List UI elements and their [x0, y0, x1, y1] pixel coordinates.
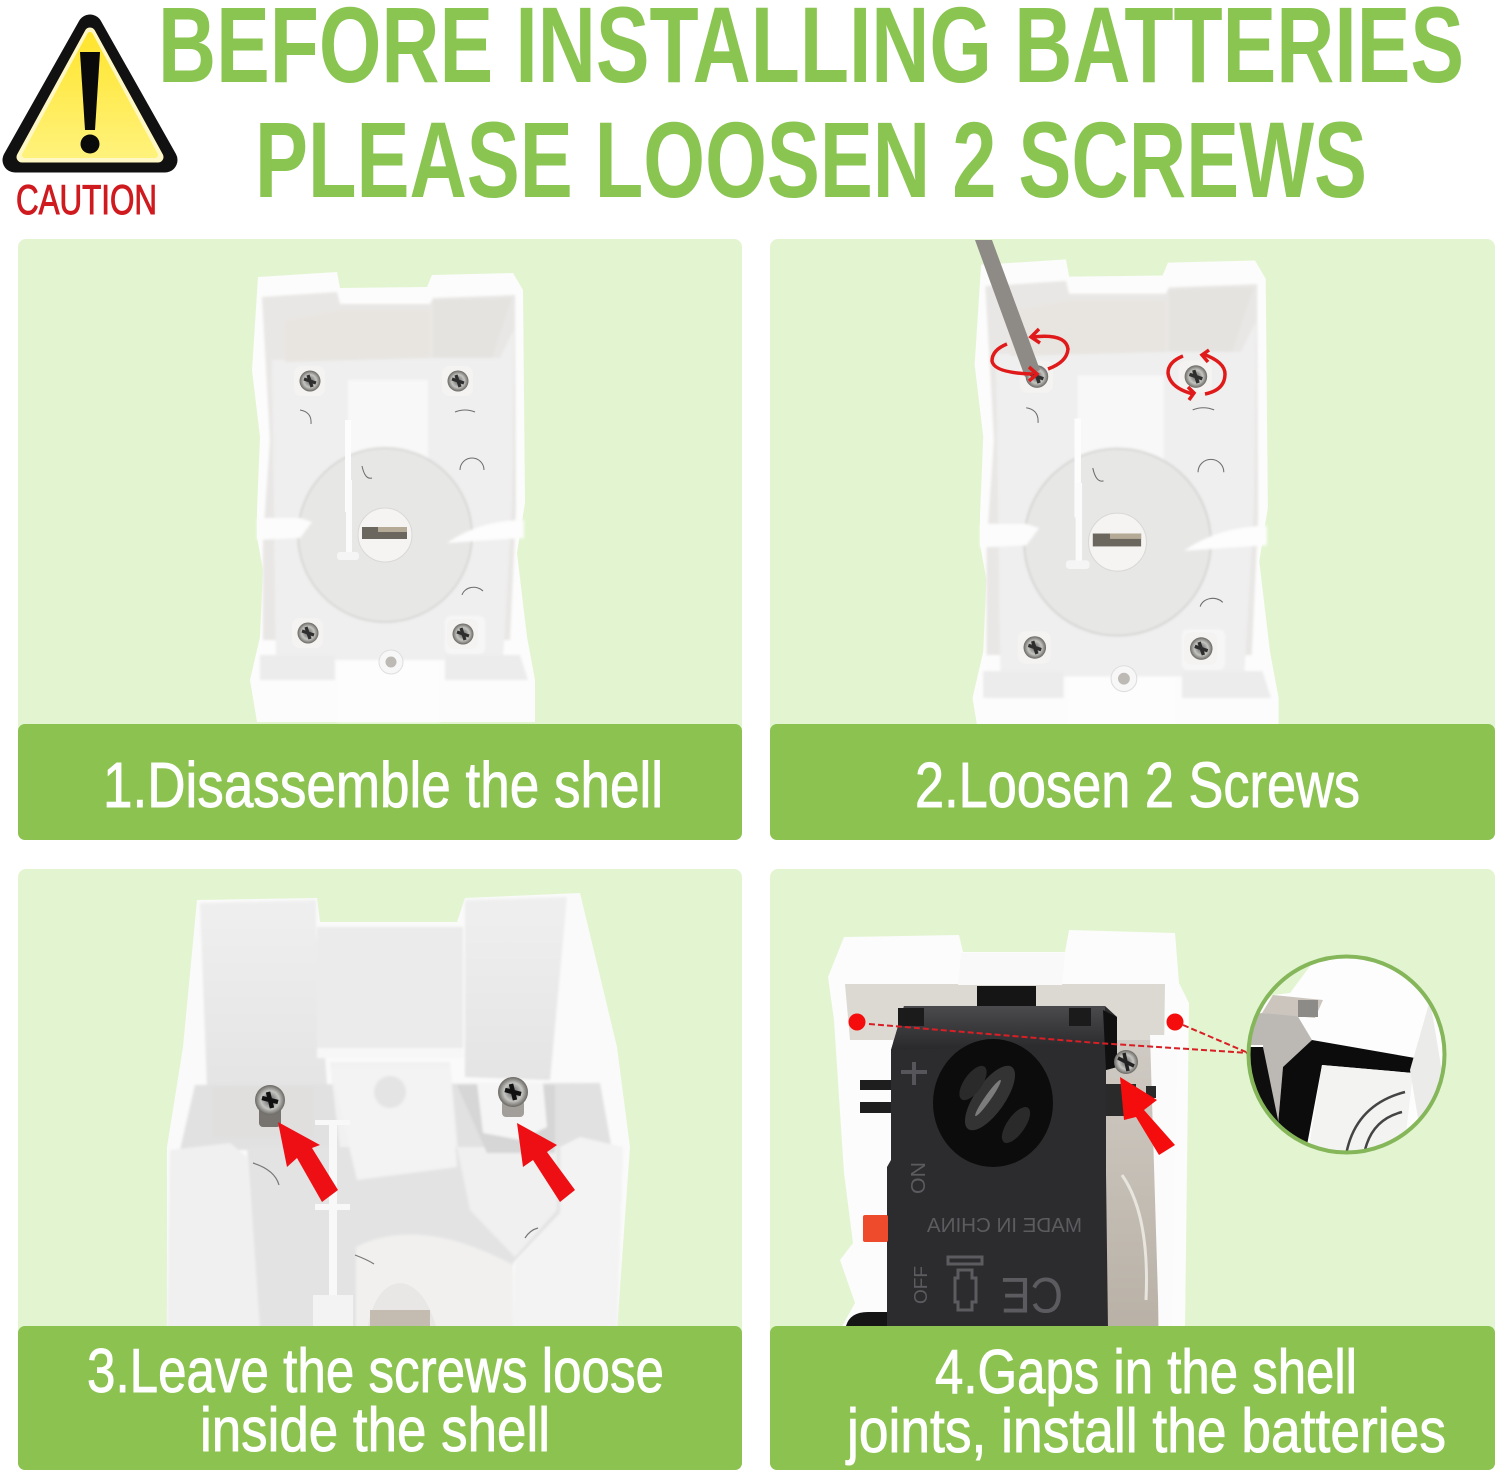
box markings: OFF	[911, 1266, 931, 1304]
panel background	[18, 869, 742, 1470]
shell interior	[845, 984, 1165, 1330]
caption bar	[18, 724, 742, 840]
arrow left	[278, 1122, 338, 1202]
panel background	[18, 239, 742, 840]
photo: close-up of loose screws	[167, 893, 630, 1330]
icon: warning triangle	[15, 27, 165, 160]
box markings: ON	[908, 1162, 930, 1194]
panel: step 2 loosen 2 screws	[770, 239, 1495, 840]
photo: shell with screwdriver	[972, 240, 1279, 743]
caption bar: 4.Gaps in the shell	[935, 1338, 1357, 1407]
box markings: MADE IN CHINA	[926, 1215, 1082, 1237]
caption bar	[770, 1326, 1495, 1470]
caption bar: 3.Leave the screws loose	[87, 1337, 664, 1406]
screw left	[255, 1085, 285, 1127]
caution label: CAUTION	[16, 176, 157, 223]
rotation arrows left	[992, 329, 1068, 381]
plus mark	[901, 1062, 927, 1085]
caption bar	[18, 1326, 742, 1470]
panel background	[770, 239, 1495, 840]
red arrow	[1120, 1077, 1175, 1155]
bottom foot	[846, 1312, 887, 1326]
caption bar	[770, 724, 1495, 840]
white shell	[828, 930, 1189, 1330]
left pins	[860, 1080, 891, 1113]
right pins	[1106, 1084, 1156, 1116]
dial	[933, 1039, 1053, 1167]
panel: step 1 disassemble the shell	[18, 239, 742, 840]
caption bar: 1.Disassemble the shell	[103, 749, 663, 821]
caution icon	[15, 27, 165, 223]
panel: step 3 leave the screws loose	[18, 869, 742, 1470]
red switch	[863, 1215, 888, 1242]
battery box top tab	[977, 986, 1036, 1006]
title	[158, 0, 1464, 220]
panel: step 4 install the batteries	[770, 869, 1495, 1470]
box markings	[908, 1162, 1082, 1323]
box markings: CE	[1001, 1267, 1063, 1323]
photo: shell with battery box	[828, 930, 1249, 1330]
photo: open white shell	[250, 272, 535, 722]
panel background	[770, 869, 1495, 1470]
gap marker dots and leader lines	[848, 1014, 1249, 1053]
rotation arrows right	[1168, 350, 1225, 400]
magnified inset circle	[1240, 950, 1445, 1160]
screw right	[498, 1077, 528, 1117]
caption bar: 2.Loosen 2 Screws	[915, 749, 1360, 821]
arrow right	[517, 1123, 575, 1202]
battery box	[887, 1006, 1117, 1330]
screw	[1114, 1050, 1138, 1074]
screwdriver	[975, 240, 1040, 377]
caption bar: inside the shell	[200, 1396, 550, 1465]
